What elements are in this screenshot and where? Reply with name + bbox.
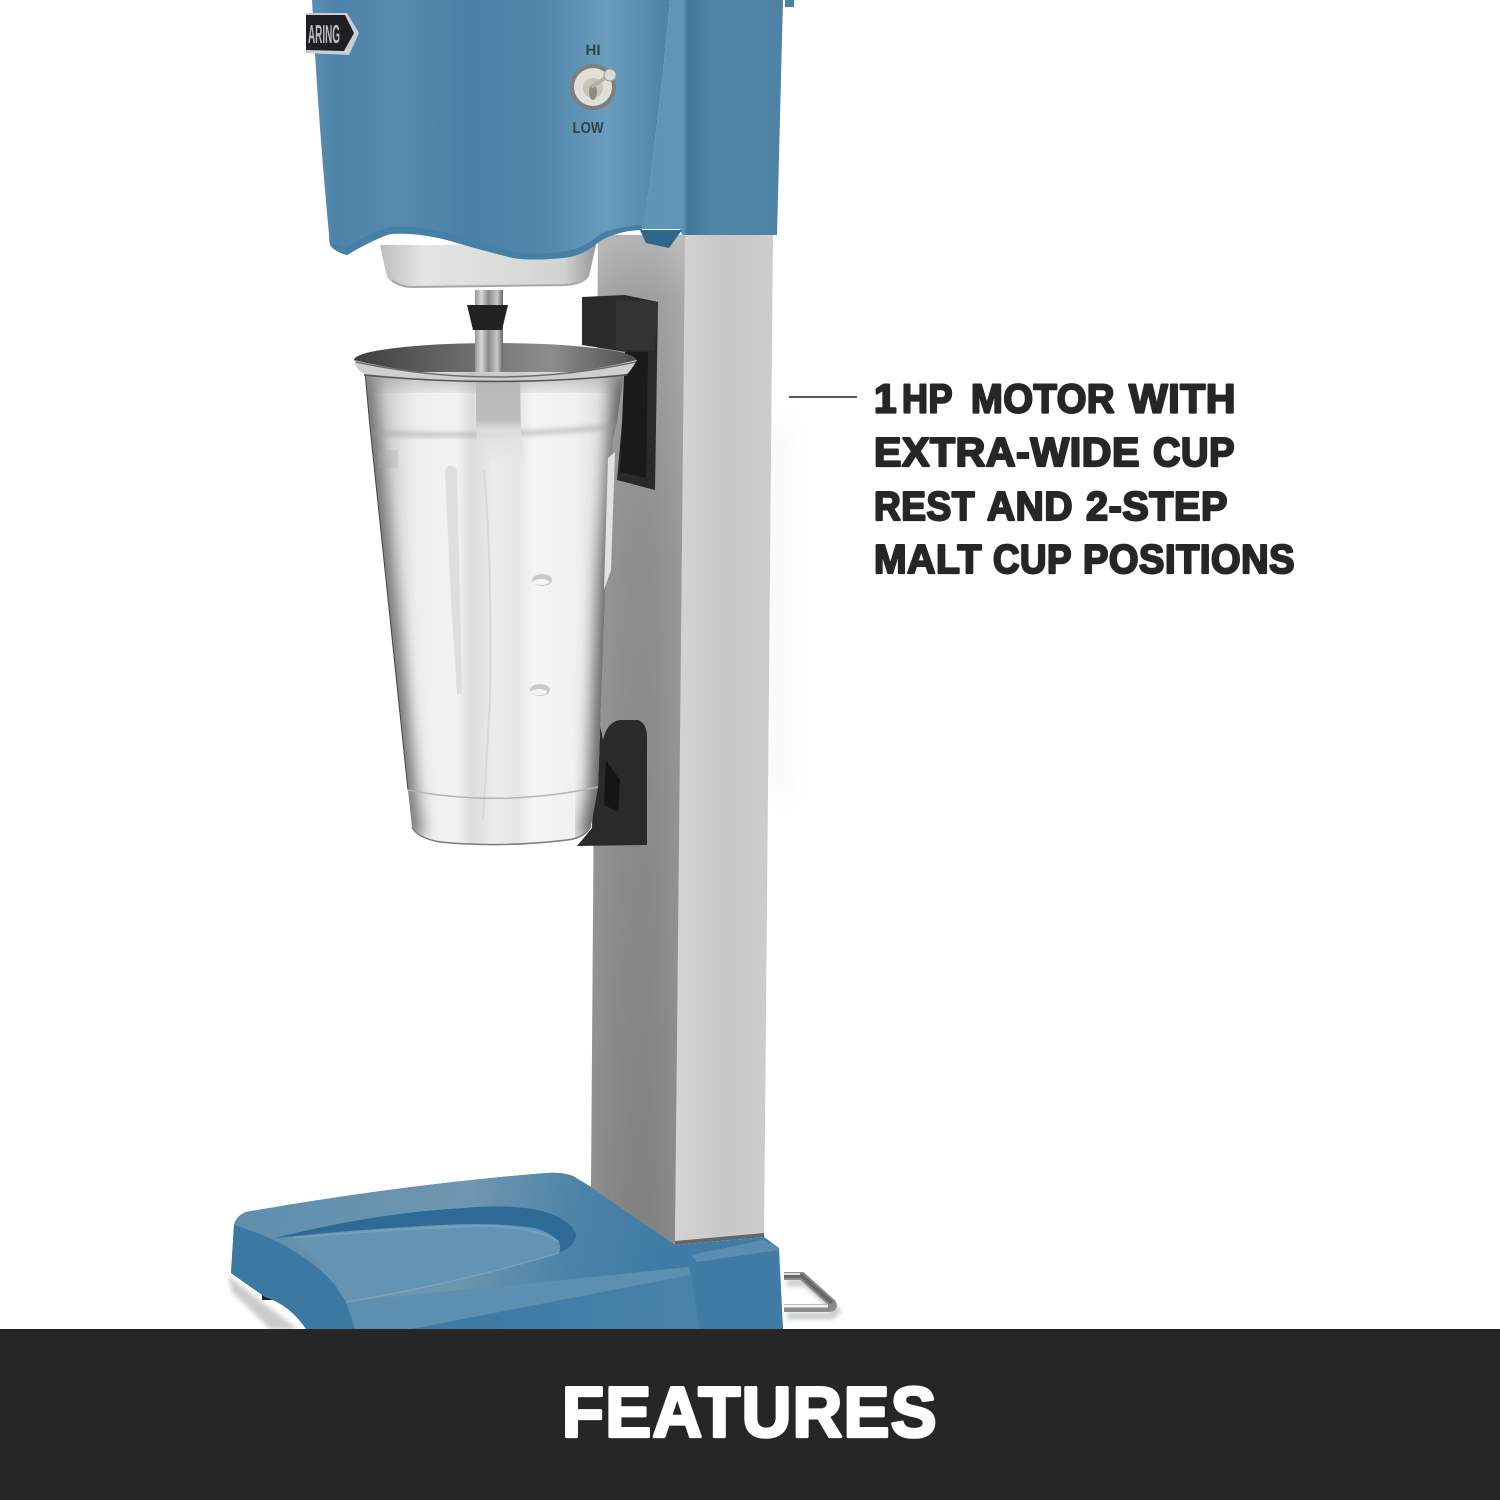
feature callout text: CUP	[1153, 429, 1235, 475]
feature callout text: EXTRA-WIDE	[874, 429, 1140, 475]
callout leader line	[789, 396, 857, 398]
floor shadow	[228, 1275, 298, 1329]
footer bar	[0, 1329, 1500, 1500]
upper cup bracket	[582, 295, 658, 490]
feature callout text: POSITIONS	[1083, 536, 1295, 582]
corner block	[695, 1250, 783, 1329]
speed switch: LOW	[572, 120, 604, 137]
speed switch	[570, 42, 616, 137]
lower cup bracket	[577, 700, 647, 846]
steel column	[591, 235, 773, 1245]
rear panel	[642, 0, 783, 235]
cup interior	[354, 343, 636, 377]
cup rim	[354, 360, 637, 380]
feature callout text: 2-STEP	[1086, 483, 1228, 529]
column front face	[675, 235, 773, 1245]
feature callout text: WITH	[1129, 375, 1236, 421]
feature callout text: MOTOR	[971, 375, 1115, 421]
cord handle	[784, 1274, 837, 1316]
base top surface	[234, 1173, 691, 1302]
rubber foot	[262, 1293, 274, 1300]
soft edge shading	[360, 372, 630, 840]
column left face	[591, 235, 686, 1245]
brand badge: ARING	[308, 19, 340, 49]
malt cup	[354, 340, 637, 845]
milkshake mixer product illustration	[228, 0, 857, 1329]
column soft shadow	[772, 420, 790, 800]
capacity marking	[378, 450, 398, 468]
feature callout text: HP	[902, 375, 953, 421]
measure notches	[532, 574, 552, 586]
feature callout text: 1	[874, 375, 897, 421]
drive skirt	[380, 245, 596, 288]
feature callout text: AND	[987, 483, 1073, 529]
mixer head housing	[312, 0, 794, 260]
feature callout text: CUP	[993, 536, 1072, 582]
right highlight strip	[604, 452, 615, 590]
spindle collar and shaft	[467, 290, 508, 360]
base stand	[228, 1173, 783, 1329]
feature callout text: REST	[874, 483, 975, 529]
footer heading: FEATURES	[562, 1374, 938, 1452]
feature callout text: MALT	[874, 536, 982, 582]
cup foot band	[408, 787, 598, 798]
centre panel	[476, 377, 527, 470]
feature callout text	[874, 375, 1295, 582]
cup body	[365, 372, 624, 845]
brand badge	[306, 13, 359, 55]
cup recess	[293, 1225, 575, 1302]
speed switch: HI	[586, 42, 600, 59]
measure line groove	[445, 466, 462, 694]
